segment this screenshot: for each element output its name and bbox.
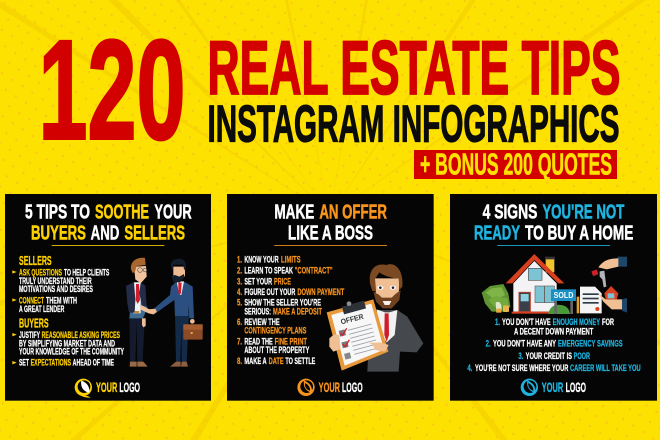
list: four signs bbox=[467, 317, 641, 373]
numbered list: offer steps: MAKE A bbox=[244, 356, 267, 366]
title: 120: 120 bbox=[38, 11, 186, 170]
text block: sellers tips: TO HELP CLIENTS bbox=[64, 268, 109, 278]
numbered list: offer steps: SERIOUS: bbox=[244, 306, 271, 316]
clipboard: offer: OFFER bbox=[340, 312, 365, 326]
icon: logo mark bbox=[521, 379, 538, 396]
numbered list: offer steps: READ THE bbox=[244, 336, 273, 346]
heading: 5 tips to soothe bbox=[25, 201, 192, 246]
text block: buyers tips bbox=[12, 315, 124, 368]
numbered list: offer steps: REVIEW THE bbox=[244, 317, 280, 327]
list: four signs: 1. bbox=[495, 317, 500, 327]
heading: 5 tips to soothe: SELLERS bbox=[124, 222, 185, 244]
heading: 4 signs: 4 SIGNS bbox=[483, 201, 537, 223]
logo: your logo: YOUR bbox=[96, 379, 117, 395]
numbered list: offer steps: 7. bbox=[237, 336, 242, 346]
logo: your logo: LOGO bbox=[342, 379, 363, 395]
numbered list: offer steps: DATE bbox=[269, 356, 284, 366]
text block: buyers tips: REASONABLE ASKING PRICES bbox=[42, 330, 120, 340]
text block: buyers tips: BY SIMPLIFYING MARKET DATA AND bbox=[19, 338, 115, 348]
text block: buyers tips: AHEAD OF TIME bbox=[73, 358, 114, 368]
text block: sellers tips: TRULY UNDERSTAND THEIR bbox=[19, 276, 92, 286]
hand with small house bbox=[598, 286, 627, 313]
numbered list: offer steps: DOWN PAYMENT bbox=[297, 287, 345, 297]
text block: sellers tips: A GREAT LENDER bbox=[19, 304, 64, 314]
numbered list: offer steps: MAKE A DEPOSIT bbox=[273, 306, 322, 316]
list: four signs: YOUR CREDIT IS bbox=[526, 351, 572, 361]
numbered list: offer steps bbox=[237, 255, 345, 366]
logo: your logo: YOUR bbox=[319, 379, 340, 395]
logo: your logo: LOGO bbox=[119, 379, 140, 395]
list: four signs: A DECENT DOWN PAYMENT bbox=[514, 326, 594, 336]
heading: make an offer like a boss bbox=[274, 201, 387, 246]
numbered list: offer steps: 1. bbox=[237, 255, 242, 265]
heading: make an offer like a boss: LIKE A BOSS bbox=[288, 222, 373, 244]
illustration: two businessmen shaking hands bbox=[126, 258, 203, 367]
numbered list: offer steps: 8. bbox=[237, 356, 242, 366]
logo: your logo bbox=[297, 379, 363, 396]
text block: buyers tips: SET bbox=[19, 358, 29, 368]
numbered list: offer steps: ABOUT THE PROPERTY bbox=[244, 345, 310, 355]
list: four signs: 3. bbox=[518, 351, 523, 361]
list: four signs: 2. bbox=[486, 339, 491, 349]
list: four signs: YOU DON'T HAVE ANY bbox=[493, 339, 556, 349]
list: four signs: POOR bbox=[574, 351, 590, 361]
text block: buyers tips: JUSTIFY bbox=[19, 330, 40, 340]
text block: buyers tips: EXPECTATIONS bbox=[31, 358, 71, 368]
text block: buyers tips: YOUR KNOWLEDGE OF THE COMMUNITY bbox=[19, 347, 124, 357]
numbered list: offer steps: 5. bbox=[237, 298, 242, 308]
list: four signs: EMERGENCY SAVINGS bbox=[558, 339, 623, 349]
list: four signs: FOR bbox=[602, 317, 614, 327]
heading: 5 tips to soothe: AND bbox=[91, 222, 119, 244]
house bbox=[506, 254, 564, 314]
heading: 5 tips to soothe: SOOTHE bbox=[95, 201, 149, 223]
list: four signs: ENOUGH MONEY bbox=[553, 317, 600, 327]
numbered list: offer steps: 6. bbox=[237, 317, 242, 327]
sold sign: SOLD bbox=[554, 291, 574, 300]
contract document bbox=[577, 287, 602, 313]
heading: 4 signs: READY bbox=[474, 222, 520, 244]
numbered list: offer steps: SET YOUR bbox=[244, 276, 272, 286]
numbered list: offer steps: 3. bbox=[237, 276, 242, 286]
text block: sellers tips: MOTIVATIONS AND DESIRES bbox=[19, 284, 93, 294]
left man bbox=[126, 258, 157, 367]
numbered list: offer steps: LIMITS bbox=[281, 255, 301, 265]
numbered list: offer steps: TO SETTLE bbox=[285, 356, 315, 366]
illustration: house, money, sold sign, keys bbox=[482, 254, 627, 314]
heading: 5 tips to soothe: BUYERS bbox=[31, 222, 86, 244]
list: four signs: YOU'RE NOT SURE WHERE YOUR bbox=[475, 363, 568, 373]
heading: make an offer like a boss: AN OFFER bbox=[319, 201, 387, 223]
text block: sellers tips: SELLERS bbox=[19, 253, 52, 268]
text block: sellers tips bbox=[12, 253, 109, 314]
numbered list: offer steps: FINE PRINT bbox=[275, 336, 307, 346]
numbered list: offer steps: CONTINGENCY PLANS bbox=[244, 326, 306, 336]
numbered list: offer steps: 4. bbox=[237, 287, 242, 297]
hands bbox=[329, 334, 389, 352]
text block: sellers tips: THEM WITH bbox=[46, 295, 77, 305]
heading: 4 signs bbox=[474, 201, 633, 246]
list: four signs: YOU DON'T HAVE bbox=[502, 317, 551, 327]
text block: buyers tips: BUYERS bbox=[19, 315, 49, 330]
text block: sellers tips: CONNECT bbox=[19, 295, 44, 305]
panel: not ready to buy a home bbox=[450, 194, 657, 401]
list: four signs: 4. bbox=[467, 363, 472, 373]
numbered list: offer steps: FIGURE OUT YOUR bbox=[244, 287, 295, 297]
money pile bbox=[482, 284, 510, 313]
panel: buyers and sellers bbox=[5, 194, 211, 401]
text block: sellers tips: ASK QUESTIONS bbox=[19, 268, 62, 278]
right man bbox=[149, 259, 203, 367]
heading: 5 tips to soothe: 5 TIPS TO bbox=[25, 201, 90, 223]
logo: your logo: YOUR bbox=[542, 379, 563, 395]
heading: 5 tips to soothe: YOUR bbox=[154, 201, 192, 223]
icon: logo mark bbox=[297, 379, 315, 396]
panel: not ready to buy a home: LOGO bbox=[566, 379, 586, 395]
sold sign bbox=[548, 289, 576, 314]
logo: your logo bbox=[521, 379, 586, 396]
businessman bbox=[367, 264, 423, 372]
icon: logo mark bbox=[75, 379, 92, 398]
heading: make an offer like a boss: MAKE bbox=[274, 201, 314, 223]
numbered list: offer steps: KNOW YOUR bbox=[244, 255, 279, 265]
numbered list: offer steps: 2. bbox=[237, 265, 242, 275]
logo: your logo bbox=[75, 379, 140, 398]
numbered list: offer steps: LEARN TO SPEAK bbox=[244, 265, 293, 275]
numbered list: offer steps: "CONTRACT" bbox=[295, 265, 333, 275]
numbered list: offer steps: SHOW THE SELLER YOU'RE bbox=[244, 298, 321, 308]
numbered list: offer steps: PRICE bbox=[274, 276, 291, 286]
illustration: businessman holding offer clipboard bbox=[327, 264, 423, 372]
hand with keys bbox=[591, 257, 627, 287]
panel: make an offer bbox=[227, 194, 434, 401]
